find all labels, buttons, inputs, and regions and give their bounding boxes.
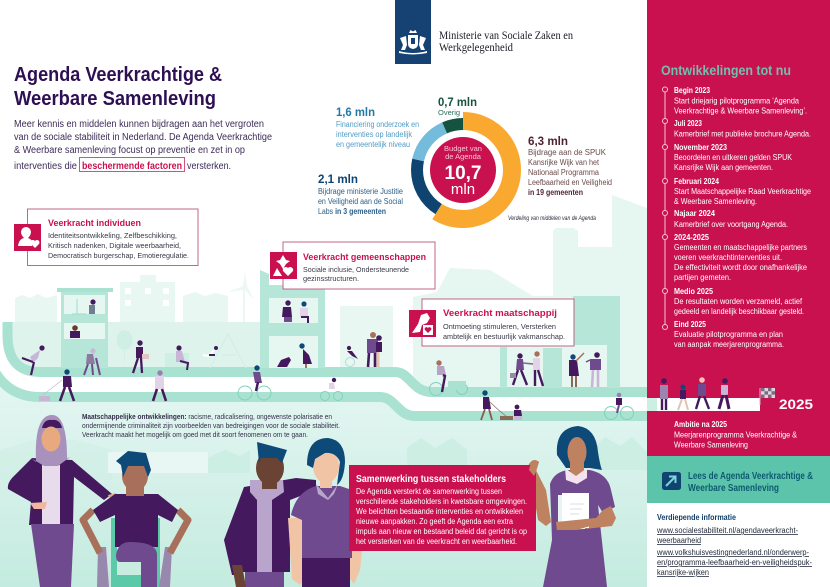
icon: person with heart [18,227,39,248]
people: dog walker right [481,390,522,420]
text: maatschappelijke ontwikkelingen: ondermijnende criminaliteit zijn voorbeelden van bedreigingen voor de sociale stabiliteit. [82,421,340,430]
donut chart: budget [414,121,512,219]
background houses in foreground [0,437,647,480]
panel: samenwerking tussen stakeholders: impuls aan nieuw en bestaand beleid dat gericht is op [356,527,527,536]
label: 1,6 mln: en gemeentelijk niveau [336,140,410,149]
person: man with polo shirt [288,438,362,587]
title: Agenda Veerkrachtige & [14,63,222,86]
timeline text: Februari 2024 [674,177,719,186]
person: elderly man [84,348,100,375]
panel: veerkracht maatschappij: ambtelijk en bestuurlijk vakmanschap. [443,332,565,341]
panel: samenwerking tussen stakeholders: De Agenda versterkt de samenwerking tussen [356,487,502,496]
person: child on bike [320,378,342,400]
timeline text: Juli 2023 [674,119,702,128]
icon: finish flag [760,388,775,405]
panel: veerkracht individuen: Democratisch burgerschap, Emotieregulatie. [48,251,189,260]
panel: veerkracht individuen: Kritisch nadenken, Digitale weerbaarheid, [48,241,181,250]
panel: veerkracht individuen: Veerkracht individuen [48,218,141,229]
label: 2,1 mln: Bijdrage ministerie Justitie [318,187,403,196]
chart caption: Verdeling van middelen van de Agenda [508,216,597,222]
intro text [14,119,272,172]
timeline text: 2024-2025 [674,233,709,242]
person: dog walker left [39,369,74,401]
intro text: versterken. [187,161,231,172]
person: woman with papers [527,426,616,587]
label: 1,6 mln: 1,6 mln [336,107,375,119]
timeline text: Start Maatschappelijke Raad Veerkrachtige [674,187,811,196]
year label: 2025 [779,396,813,412]
timeline text: gedeeld en landelijk beschikbaar gesteld. [674,307,804,316]
ministry logo: Werkgelegenheid [439,42,513,54]
person: woman with hijab [8,415,118,587]
timeline text: Evaluatie pilotprogramma en plan [674,330,783,339]
person: skater [22,345,45,375]
icon: arrow [662,472,681,490]
person: walking man [133,340,149,373]
label: 6,3 mln: Kansrijke Wijk van het [528,158,600,167]
further information: Verdiepende informatie [657,513,737,522]
donut chart: budget: Budget van [444,144,482,153]
label: 0,7 mln [438,97,477,117]
panel: veerkracht gemeenschappen: Sociale inclusie, Ondersteunende [303,265,409,274]
timeline text: van aanpak meerjarenprogramma. [674,340,784,349]
panel: samenwerking tussen stakeholders: nieuwe aanpakken. Zo geeft de Agenda een extra [356,517,513,526]
person: child in wheelchair [346,346,358,366]
text: maatschappelijke ontwikkelingen [82,412,340,439]
title [14,63,222,110]
ambition text: Meerjarenprogramma Veerkrachtige & [674,430,798,440]
panel: ontwikkelingen tot nu: Ontwikkelingen tot nu [661,62,791,78]
text: maatschappelijke ontwikkelingen: Veerkracht maakt het mogelijk om goed met dit soort fenomenen om te gaan. [82,430,308,439]
ambition text: Weerbare Samenleving [674,440,748,450]
panel: samenwerking tussen stakeholders [349,465,536,551]
label: 1,6 mln: Financiering onderzoek en [336,120,419,129]
intro text: beschermende factoren [82,161,182,172]
panel: veerkracht gemeenschappen: gezinsstructuren. [303,274,359,283]
timeline text: Najaar 2024 [674,209,716,218]
label: 6,3 mln: in 19 gemeenten [528,188,583,197]
ambition text [674,420,798,450]
label: 1,6 mln [336,107,419,149]
icon: coat of arms [399,30,427,54]
intro text: Meer kennis en middelen kunnen bijdragen aan het vergroten [14,119,264,130]
timeline text: Begin 2023 [674,86,710,95]
further information: kansrijke-wijken [657,568,709,577]
panel: veerkracht gemeenschappen [270,242,435,289]
people: high five [569,352,601,387]
person: woman on bench [176,345,188,370]
ground and road [0,322,647,587]
further information [656,513,812,577]
panel: veerkracht individuen: Identiteitsontwikkeling, Zelfbeschikking, [48,231,177,240]
timeline text: Veerkrachtige & Weerbare Samenleving’. [674,106,807,116]
buildings [57,270,620,388]
panel: veerkracht maatschappij: Ontmoeting stimuleren, Versterken [443,322,556,331]
panel: samenwerking tussen stakeholders: We belichten bestaande interventies en ontwikkelen [356,507,523,516]
further information: weerbaarheid [656,536,701,545]
timeline text: voeren veerkrachtinterventies uit. [674,253,782,262]
ministry logo: Ministerie van Sociale Zaken en [439,30,573,42]
label: 0,7 mln: 0,7 mln [438,97,477,109]
label: 0,7 mln: Overig [438,108,460,117]
label: 2,1 mln: 2,1 mln [318,174,358,186]
text: maatschappelijke ontwikkelingen: Maatschappelijke ontwikkelingen: racisme, radicalisering, ongewenste polarisatie en [82,412,332,421]
timeline text: Kamerbrief met publieke brochure Agenda. [674,130,811,138]
icon: country with heart [412,313,433,335]
intro text: van de sociale stabiliteit in Nederland. De Agenda Veerkrachtige [14,132,272,143]
panel: veerkracht maatschappij [409,299,574,346]
further information: en/programma-leefbaarheid-en-veiligheidspuk- [657,558,812,567]
label: 6,3 mln: Bijdrage aan de SPUK [528,148,607,157]
timeline text: Eind 2025 [674,320,706,329]
timeline text: November 2023 [674,143,727,152]
timeline text: Kamerbrief over voortgang Agenda. [674,220,788,229]
person: man in wheelchair [83,451,188,587]
people: handshake [510,351,543,386]
panel: samenwerking tussen stakeholders: het versterken van de veerkracht en weerbaarheid. [356,537,517,546]
label: 6,3 mln [528,136,612,197]
timeline [662,87,668,330]
person: man with hoodie [224,442,316,587]
panel: veerkracht gemeenschappen: Veerkracht gemeenschappen [303,252,426,263]
label: 1,6 mln: interventies op landelijk [336,130,412,139]
intro text: interventies die [14,161,77,172]
timeline text [674,86,811,349]
label: 2,1 mln [318,174,403,216]
road with walking people [647,377,760,411]
person: child on swing [203,346,218,356]
label: 2,1 mln: en Veiligheid aan de Social [318,197,403,206]
intro text: & Weerbare samenleving focust op preventie en zet in op [14,145,245,156]
donut chart: budget: 10,7 [445,163,481,184]
title: Weerbare Samenleving [14,87,216,110]
ministry logo [395,0,573,64]
timeline text: De effectiviteit wordt door onafhankelijke [674,263,807,272]
label: 6,3 mln: 6,3 mln [528,136,568,148]
call to action [647,456,830,503]
people: at table [282,300,308,323]
person: walking woman [153,370,166,401]
call to action: Weerbare Samenleving [688,483,779,494]
person: cyclist [238,365,271,400]
icon: community [273,255,293,276]
timeline text: Beoordelen en uitkeren gelden SPUK [674,153,793,162]
timeline text: De resultaten worden verzameld, actief [674,297,803,306]
timeline text: Medio 2025 [674,287,713,296]
donut chart: budget: de Agenda [445,152,482,161]
label: 2,1 mln: Labs in 3 gemeenten [318,207,386,216]
panel: veerkracht maatschappij: Veerkracht maatschappij [443,308,557,319]
city skyline background [12,195,647,387]
timeline text: partijen gemeten. [674,273,731,282]
person: cyclist right [604,393,634,420]
panel: ontwikkelingen tot nu [647,0,830,456]
panel: samenwerking tussen stakeholders: verschillende stakeholders in kwetsbare omgevingen. [356,497,527,506]
person: woman with dog [277,343,312,368]
person: cargo bike [430,360,468,396]
people: couple [367,332,382,367]
hand over panel [529,460,539,476]
timeline text: Start driejarig pilotprogramma ‘Agenda [674,96,799,106]
timeline text: & Weerbare Samenleving. [674,197,757,206]
label: 6,3 mln: Leefbaarheid en Veiligheid [528,178,612,187]
ambition text: Ambitie na 2025 [674,420,727,429]
label: 6,3 mln: Nationaal Programma [528,168,600,177]
timeline text: Kansrijke Wijk aan gemeenten. [674,163,773,172]
panel: veerkracht individuen [14,209,198,266]
further information: www.volkshuisvestingnederland.nl/onderwerp- [656,548,809,557]
panel: samenwerking tussen stakeholders: Samenwerking tussen stakeholders [356,474,506,485]
further information: www.socialestabiliteit.nl/agendaveerkracht- [656,526,798,535]
donut chart: budget: mln [451,181,475,198]
timeline text: Gemeenten en maatschappelijke partners [674,243,807,252]
people: office windows [70,299,96,338]
small people on the street [22,299,634,420]
